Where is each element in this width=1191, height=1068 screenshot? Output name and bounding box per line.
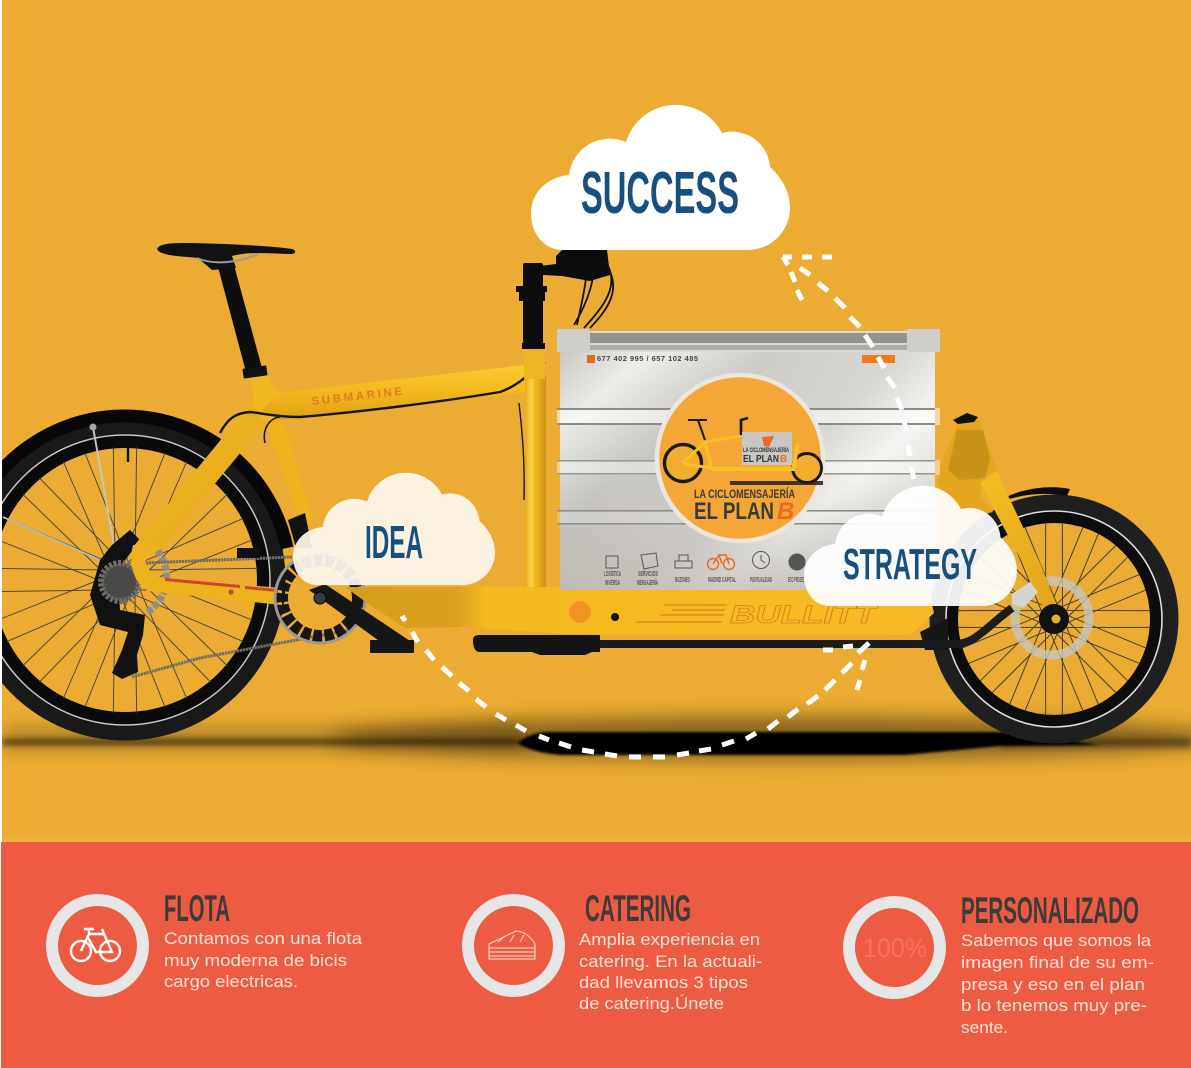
- rear derailleur: [90, 530, 145, 679]
- front hub: [1039, 604, 1069, 634]
- cargo bike: [0, 243, 1170, 735]
- flota text: cargo electricas.: [164, 973, 298, 991]
- service labels: INVERSA: [605, 578, 620, 587]
- cassette: [101, 563, 139, 601]
- platform support: [920, 618, 948, 650]
- head tube: [519, 347, 546, 592]
- cargo box: [557, 329, 940, 590]
- icon: cake slice: [489, 931, 535, 959]
- catering heading: CATERING: [585, 888, 691, 929]
- dashed arrow: idea to strategy: [402, 616, 869, 757]
- frame cable: [220, 362, 545, 443]
- catering text: catering. En la actuali-: [579, 953, 762, 971]
- seat stay: [133, 398, 270, 550]
- emblem: [569, 601, 591, 623]
- percent label: 100%: [863, 933, 927, 963]
- service labels: MENSAJERÍA: [637, 578, 658, 587]
- seat tube bracket: [237, 513, 312, 558]
- icon ring: [468, 900, 559, 991]
- handlebar stem: [516, 250, 610, 349]
- box lid: [557, 329, 940, 352]
- service icons: [606, 552, 805, 570]
- phone numbers: 677 402 995 / 657 102 485: [597, 354, 698, 363]
- service labels: LOGÍSTICA: [604, 569, 621, 578]
- cloud: idea: [293, 473, 495, 585]
- brake caliper: [1012, 582, 1038, 608]
- seat cluster: [250, 376, 280, 418]
- social tag: [862, 355, 895, 363]
- icon: orange bike: [708, 555, 734, 570]
- front headset: [937, 413, 997, 520]
- seat collar: [242, 365, 268, 379]
- brake cables: [574, 262, 613, 328]
- flota heading: FLOTA: [164, 888, 230, 929]
- flota text: muy moderna de bicis: [164, 952, 347, 970]
- personalizado text: Sabemos que somos la: [961, 932, 1152, 950]
- cloud: success: [531, 105, 790, 250]
- saddle: [157, 243, 295, 270]
- mini bike: [664, 418, 823, 483]
- front disc rotor: [1015, 581, 1089, 655]
- service labels: SERVICIOS: [638, 569, 658, 578]
- kickstand: [473, 635, 600, 655]
- brand lines: [636, 605, 727, 622]
- icon: box: [606, 556, 618, 568]
- icon ring: [52, 900, 143, 991]
- feature: flota: [52, 888, 363, 991]
- catering text: Amplia experiencia en: [579, 931, 760, 949]
- phone icon: [587, 355, 595, 363]
- ground shadow: [2, 716, 1191, 760]
- seat post: [218, 265, 262, 372]
- rear wheel: [0, 416, 287, 733]
- dot: [611, 613, 619, 621]
- dashed arrow: strategy to success: [783, 257, 914, 479]
- rear disc rotor: [146, 545, 167, 613]
- mini bike: LA CICLOMENSAJERÍA: [743, 446, 789, 454]
- top tube: [262, 365, 528, 420]
- mini bike: EL PLAN: [743, 454, 779, 465]
- cargo box: ECO PROJECT: [788, 575, 806, 584]
- icon: clock: [752, 552, 770, 568]
- feature: catering: [468, 888, 762, 1013]
- personalizado text: presa y eso en el plan: [961, 976, 1145, 994]
- icon: printer: [675, 555, 692, 568]
- icon: globe: [789, 554, 805, 570]
- front fork: [980, 472, 1060, 617]
- logo badge: [657, 375, 823, 541]
- strategy label: STRATEGY: [843, 540, 977, 589]
- badge letter B: B: [777, 498, 794, 525]
- flota text: Contamos con una flota: [164, 930, 363, 948]
- catering text: dad llevamos 3 tipos: [579, 974, 748, 992]
- rear dropout: [131, 545, 165, 589]
- chain stay: [143, 577, 282, 605]
- mini bike: B: [780, 454, 787, 465]
- seat tube: [265, 418, 314, 527]
- success label: SUCCESS: [581, 160, 739, 226]
- service labels: PUNTUALIDAD: [750, 575, 772, 584]
- badge line two: EL PLAN: [694, 498, 774, 525]
- bottom panel: [1, 842, 1191, 1068]
- cloud: strategy: [804, 486, 1017, 606]
- service labels: BUZONEO: [675, 575, 690, 584]
- personalizado text: imagen final de su em-: [961, 954, 1154, 972]
- badge line one: LA CICLOMENSAJERÍA: [694, 486, 795, 501]
- brand wordmark: BULLITT: [730, 601, 880, 629]
- catering text: de catering.Únete: [579, 994, 724, 1013]
- chainring and crank: [275, 553, 414, 653]
- icon: folder: [641, 553, 658, 569]
- icon ring: [849, 902, 940, 993]
- service labels: [604, 569, 806, 587]
- catering text: [579, 931, 762, 1013]
- background: [2, 0, 1191, 842]
- service labels: MADRID CAPITAL: [708, 575, 736, 584]
- idea label: IDEA: [365, 516, 423, 568]
- box body: [560, 350, 935, 590]
- personalizado text: [961, 932, 1154, 1037]
- feature: personalizado: [849, 890, 1154, 1037]
- front wheel: [938, 487, 1170, 735]
- icon: bicycle: [71, 929, 120, 961]
- cargo platform: [345, 587, 934, 635]
- flota text: [164, 930, 363, 991]
- personalizado text: b lo tenemos muy pre-: [961, 997, 1147, 1015]
- frame name: SUBMARINE: [311, 386, 403, 408]
- chain: [132, 557, 350, 677]
- box straps: [557, 408, 940, 525]
- steering rod: [475, 608, 1012, 644]
- personalizado text: sente.: [961, 1019, 1008, 1037]
- bottom edge strip: [2, 837, 1191, 842]
